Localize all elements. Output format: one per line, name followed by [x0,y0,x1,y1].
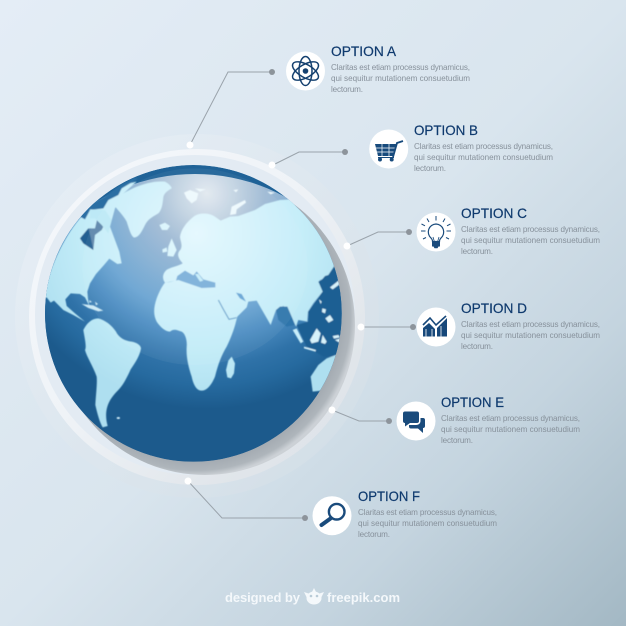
connector E [328,406,392,424]
heading C: OPTION C [461,205,527,221]
arctic islands [184,188,275,215]
connector A [186,69,275,148]
text C: lectorum. [461,247,493,256]
caribbean islands [82,300,103,311]
text B [414,142,553,173]
australia [311,354,340,392]
footer credit: freepik.com [327,590,400,605]
heading F: OPTION F [358,488,420,504]
text A [331,63,470,94]
red sea [218,300,237,319]
footer credit: designed by [225,590,301,605]
text D: lectorum. [461,342,493,351]
connector B [268,149,348,168]
text C: qui sequitur mutationem consuetudium [461,236,600,245]
text B: qui sequitur mutationem consuetudium [414,153,553,162]
text A: lectorum. [331,85,363,94]
greenland [113,181,172,238]
text C [461,225,600,256]
inner translucent ring [35,155,355,475]
text F: qui sequitur mutationem consuetudium [358,519,497,528]
iceland [159,223,170,230]
text A: Claritas est etiam processus dynamicus, [331,63,470,72]
text F: Claritas est etiam processus dynamicus, [358,508,497,517]
white ring [29,149,365,485]
baffin island [90,209,112,233]
text E [441,414,580,445]
philippine sea [297,265,345,357]
ocean rim [45,165,342,462]
ocean [45,174,342,462]
text E: Claritas est etiam processus dynamicus, [441,414,580,423]
text E: qui sequitur mutationem consuetudium [441,425,580,434]
icon: chat bubbles [396,402,436,440]
globe with rings [29,149,365,485]
footer credit [225,588,400,605]
eurasia and africa [154,199,335,391]
option C [416,205,600,256]
heading B: OPTION B [414,122,478,138]
connector C [344,229,412,250]
bay of bengal [276,307,295,327]
connector F [184,478,308,521]
option E [396,394,580,445]
persian gulf [236,293,246,302]
inner sphere highlight [82,168,308,365]
option A [286,43,470,94]
heading E: OPTION E [441,394,504,410]
text D: qui sequitur mutationem consuetudium [461,331,600,340]
uk [162,238,177,257]
text C: Claritas est etiam processus dynamicus, [461,225,600,234]
globe map [45,165,342,462]
text B: Claritas est etiam processus dynamicus, [414,142,553,151]
icon: atom [286,52,325,90]
italy [195,274,203,282]
cast shadow crescent [55,175,355,475]
icon: light bulb [416,212,456,252]
icon: freepik logo [304,588,324,604]
text D: Claritas est etiam processus dynamicus, [461,320,600,329]
heading D: OPTION D [461,300,527,316]
option F [312,488,497,539]
option B [369,122,553,173]
heading A: OPTION A [331,43,397,59]
mediterranean sea [165,271,215,288]
text A: qui sequitur mutationem consuetudium [331,74,470,83]
text E: lectorum. [441,436,473,445]
south america [83,318,141,427]
text B: lectorum. [414,164,446,173]
icon: cart [369,130,408,168]
falkland islands [117,417,120,419]
outer halo ring [15,134,379,498]
indonesia and japan [304,280,341,352]
malay peninsula [293,328,303,343]
north america [45,182,137,322]
text F: lectorum. [358,530,390,539]
text D [461,320,600,351]
text F [358,508,497,539]
arctic channel [80,178,138,219]
madagascar [226,357,235,378]
icon: magnifier [312,496,352,535]
connector D [358,324,416,330]
option D [416,300,600,351]
icon: chart [416,308,456,346]
hudson bay [88,220,104,250]
